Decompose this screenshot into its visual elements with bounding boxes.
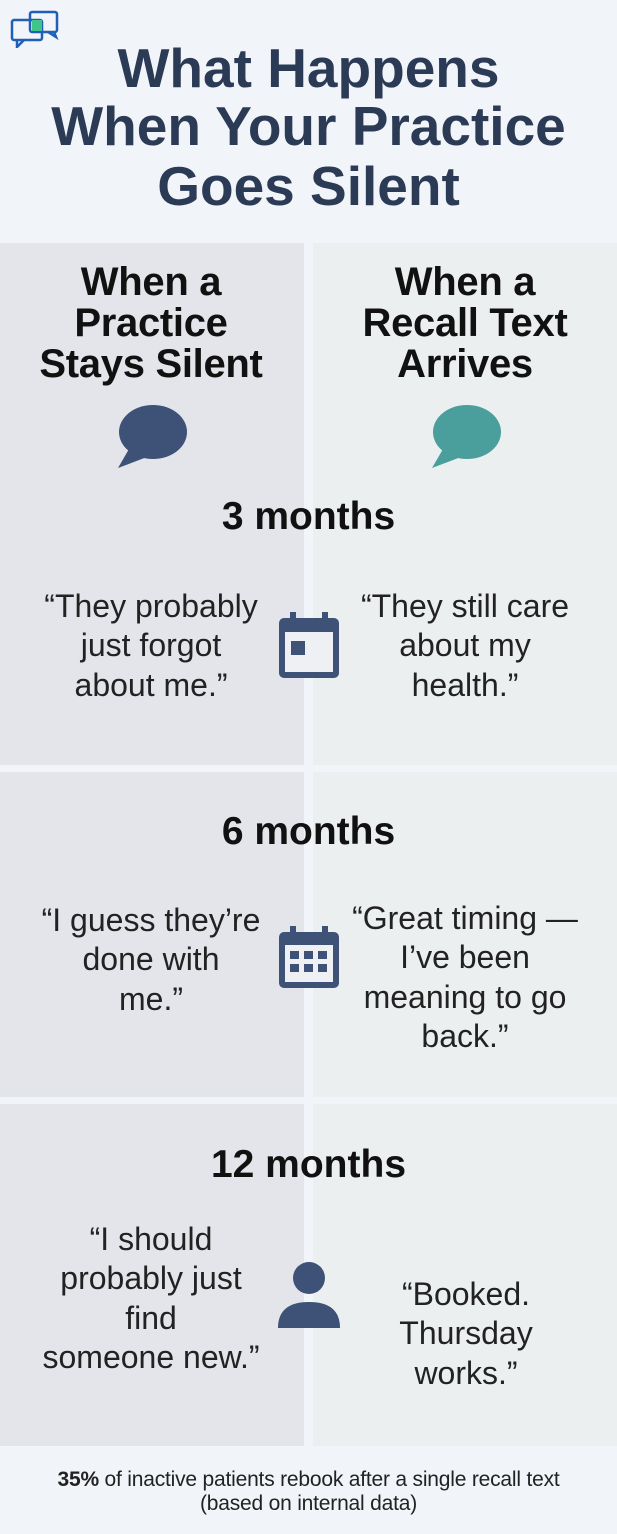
quote: recall 3 months: health.” [412, 667, 518, 703]
heading: right column: Recall Text [363, 301, 567, 345]
quote: silent 6 months [42, 902, 260, 1017]
quote: recall 6 months: meaning to go [364, 979, 566, 1015]
quote: silent 12 months: someone new.” [42, 1339, 260, 1375]
quote: recall 3 months: “They still care [361, 588, 569, 624]
heading: 6 months: 6 months [222, 810, 395, 853]
quote: recall 12 months: works.” [414, 1355, 518, 1391]
icon: calendar single [279, 612, 339, 678]
quote: silent 3 months: about me.” [75, 667, 227, 703]
quote: recall 6 months: I’ve been [400, 939, 530, 975]
title: Goes Silent [157, 155, 460, 217]
footer note: 35% of inactive patients rebook after a single recall text [57, 1468, 560, 1491]
quote: recall 6 months [352, 900, 578, 1054]
quote: silent 3 months: just forgot [81, 627, 221, 663]
icon: navy speech bubble [118, 405, 187, 468]
quote: silent 6 months: “I guess they’re [42, 902, 260, 938]
quote: recall 12 months: “Booked. [402, 1276, 530, 1312]
quote: recall 12 months: Thursday [399, 1315, 533, 1351]
heading: right column: Arrives [397, 342, 533, 386]
title: When Your Practice [51, 95, 566, 157]
quote: silent 12 months: find [125, 1300, 177, 1336]
heading: 3 months: 3 months [222, 495, 395, 538]
background panels [0, 243, 304, 1446]
heading: right column: When a [395, 260, 535, 304]
quote: silent 3 months: “They probably [44, 588, 258, 624]
icon: person [278, 1262, 340, 1328]
heading: left column: Stays Silent [39, 342, 263, 386]
quote: silent 3 months [44, 588, 258, 703]
quote: silent 12 months: probably just [60, 1260, 242, 1296]
heading: left column [39, 260, 263, 386]
heading: right column [363, 260, 568, 386]
quote: recall 3 months: about my [399, 627, 531, 663]
heading: left column: When a [81, 260, 221, 304]
icon: calendar grid [279, 926, 339, 988]
quote: recall 3 months [361, 588, 569, 703]
quote: silent 12 months: “I should [90, 1221, 212, 1257]
title [51, 37, 566, 217]
footer note [57, 1468, 560, 1515]
quote: recall 6 months: “Great timing — [352, 900, 578, 936]
icon: teal speech bubble [432, 405, 501, 468]
quote: recall 6 months: back.” [421, 1018, 509, 1054]
quote: silent 6 months: done with [82, 941, 219, 977]
footer note: (based on internal data) [200, 1492, 417, 1515]
heading: 12 months: 12 months [211, 1143, 406, 1186]
quote: silent 12 months [42, 1221, 260, 1375]
title: What Happens [118, 37, 499, 99]
heading: left column: Practice [74, 301, 228, 345]
quote: recall 12 months [399, 1276, 533, 1391]
quote: silent 6 months: me.” [119, 981, 183, 1017]
logo icon [10, 10, 58, 48]
